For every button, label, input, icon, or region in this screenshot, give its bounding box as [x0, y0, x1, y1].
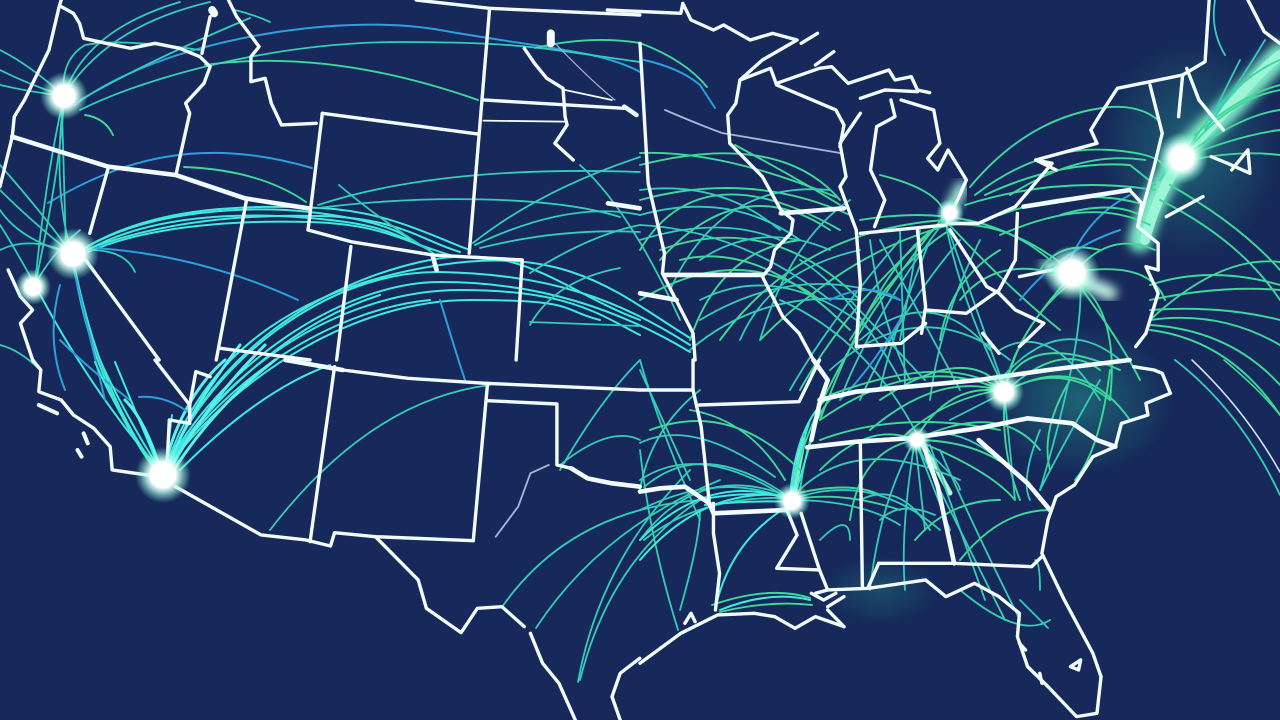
arcs: Southeast hubs [790, 272, 1130, 628]
arcs: Northeast hubs [940, 0, 1280, 495]
arcs: Northern California hub [0, 100, 470, 475]
arcs: Texas and Gulf [502, 360, 900, 682]
state borders: southeast quadrant [640, 360, 1170, 717]
far-east grey arc [1192, 360, 1280, 472]
hub: Los Angeles [135, 447, 191, 503]
arcs: Los Angeles hub [95, 157, 690, 530]
hub: Northern California [47, 228, 99, 280]
hub: Chicago area [936, 199, 964, 227]
hub: Bay Area [15, 269, 51, 305]
hub: Atlanta [903, 426, 931, 454]
hub: Washington [1044, 245, 1100, 301]
hub: Charlotte [984, 372, 1024, 412]
arcs: Pacific Northwest hub [0, 2, 715, 285]
arcs: Midwest [640, 145, 1130, 500]
state borders: northwest quadrant [0, 0, 640, 360]
hub: Louisiana [774, 483, 810, 519]
hub: New York [1156, 132, 1208, 184]
thin grey route lines [548, 36, 840, 153]
state borders: southwest quadrant [33, 360, 640, 720]
regional glow: east coast [793, 40, 1280, 625]
state borders: northeast quadrant [607, 0, 1280, 360]
hub: Pacific Northwest [40, 72, 88, 120]
